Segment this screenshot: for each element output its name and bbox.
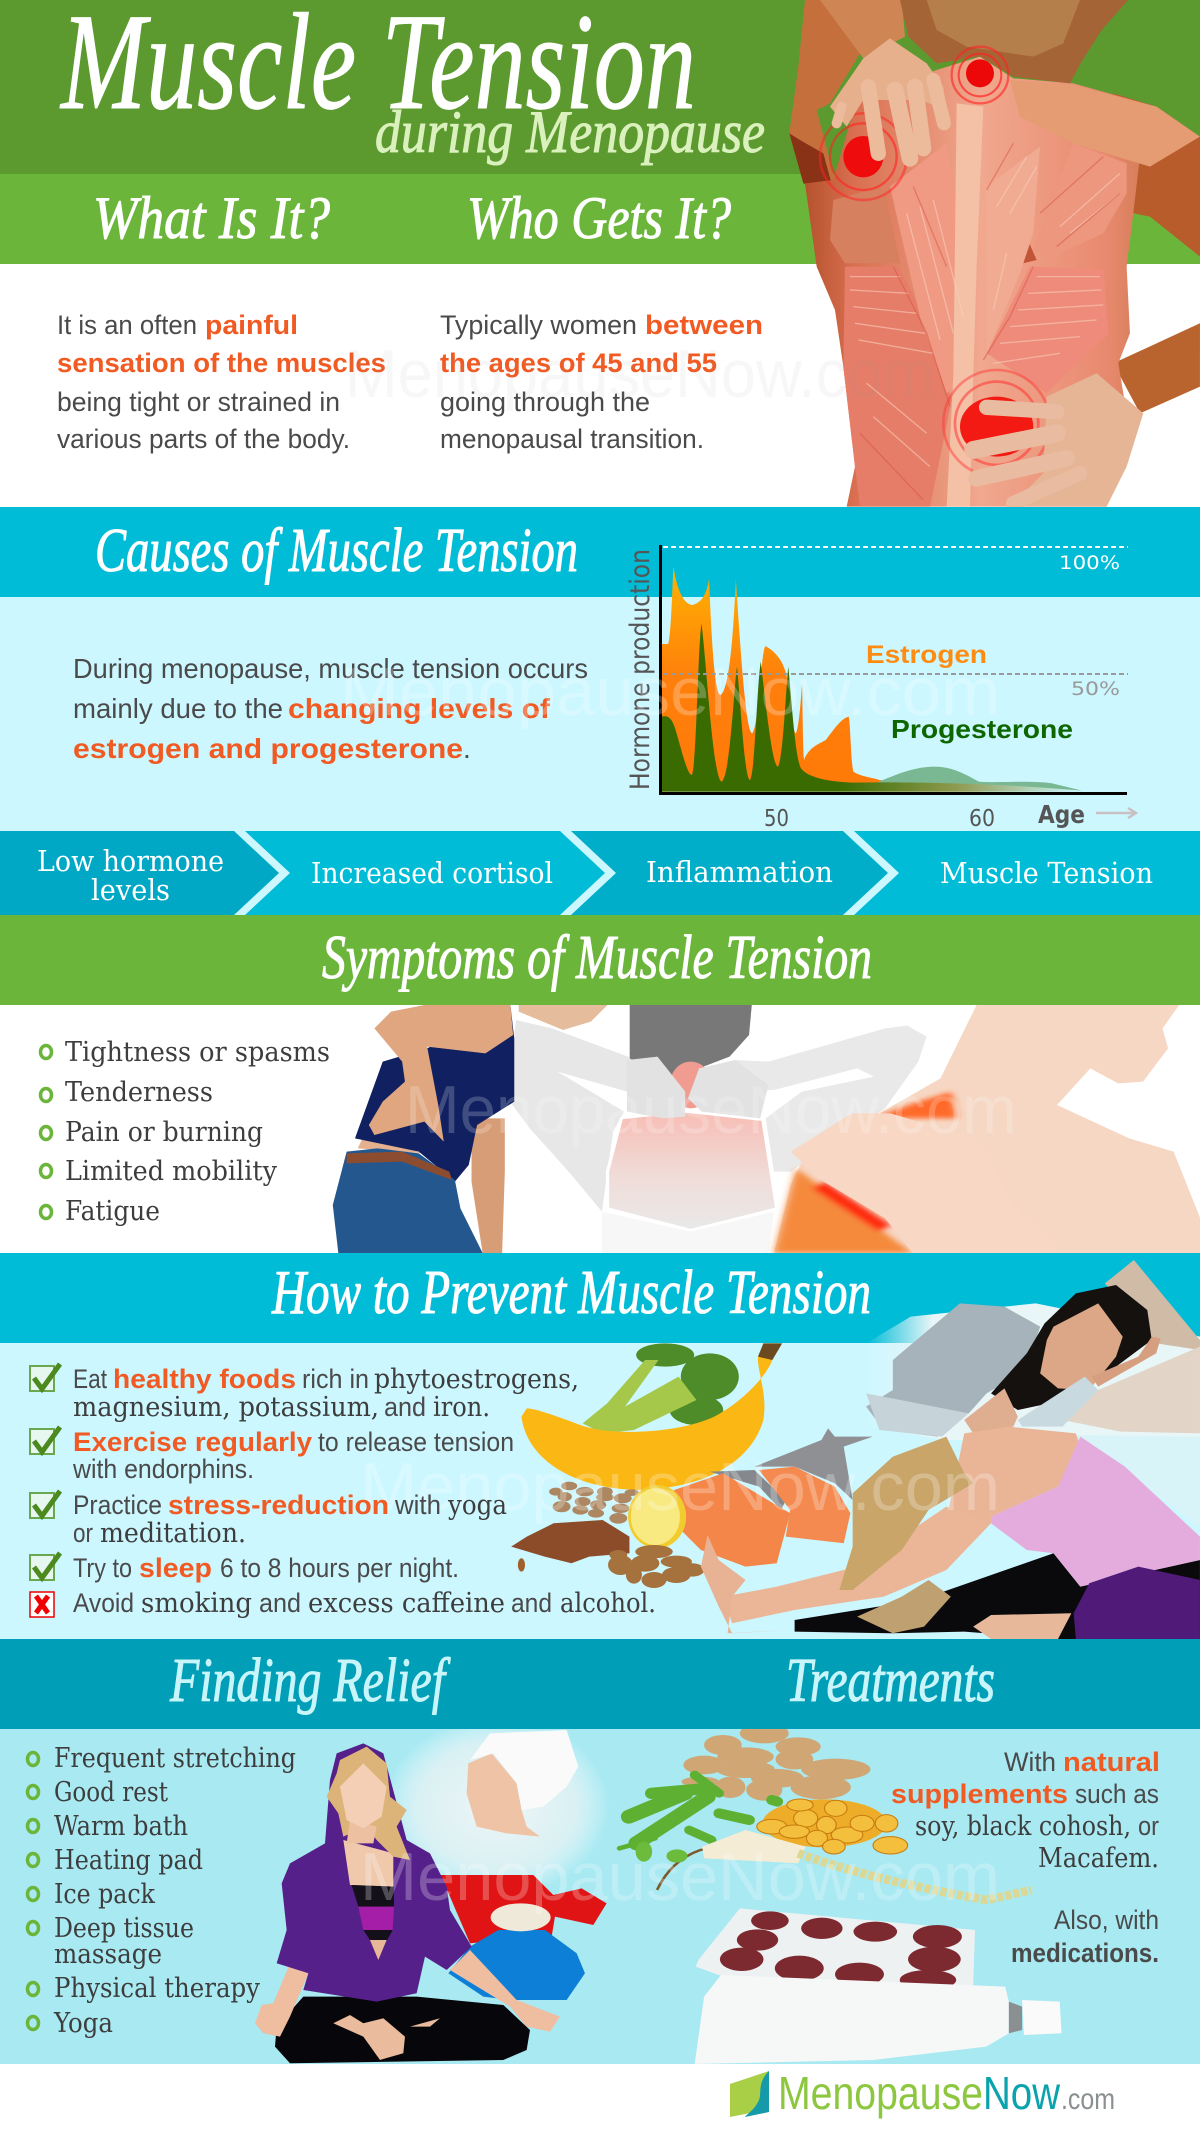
logo: Menopause bbox=[778, 2067, 983, 2119]
flower stalk bbox=[702, 1830, 1031, 1900]
towel woman: fog bbox=[383, 1717, 610, 1897]
step: inflammation: Inflammation bbox=[646, 855, 833, 889]
prevention list: alcohol. bbox=[560, 1588, 656, 1619]
woman 1: right arm bbox=[472, 1118, 505, 1255]
yoga woman: tank top bbox=[991, 1437, 1200, 1587]
tablets bbox=[681, 1723, 870, 1801]
prevention list: iron. bbox=[433, 1392, 490, 1423]
treatments text: supplements bbox=[891, 1779, 1068, 1809]
symptoms list: Fatigue bbox=[65, 1196, 160, 1227]
salmon skin bbox=[710, 1470, 786, 1510]
yoga woman: arms bbox=[723, 1507, 991, 1623]
broccoli stems bbox=[583, 1360, 696, 1433]
yoga woman: jacket bbox=[277, 1743, 472, 2002]
prevention list: with endorphins. bbox=[72, 1454, 254, 1484]
relief list: Good rest bbox=[54, 1777, 168, 1808]
heading: prevent: How to Prevent Muscle Tension bbox=[271, 1259, 871, 1327]
sleeve bbox=[1018, 1377, 1098, 1427]
sleeping woman: face bbox=[1040, 1303, 1123, 1390]
prevention list: excess caffeine bbox=[308, 1588, 505, 1619]
series label: estrogen: Estrogen bbox=[866, 641, 987, 669]
blister pack bbox=[696, 1908, 975, 1987]
stem bbox=[657, 1845, 730, 1890]
salmon steak left bbox=[674, 1473, 790, 1567]
watermark: MenopauseNow.com bbox=[360, 1839, 1000, 1915]
treatment photos bbox=[619, 1723, 1062, 2064]
woman 3: neck and shoulder bbox=[774, 1005, 1200, 1253]
relief list bbox=[28, 1743, 296, 2039]
text block: causes: . bbox=[463, 733, 471, 764]
prevention list: meditation. bbox=[100, 1518, 246, 1549]
text block: who gets it: between bbox=[645, 310, 763, 340]
yoga woman: feet bbox=[333, 2015, 440, 2060]
text block: what is it: sensation of the muscles bbox=[57, 348, 386, 378]
relief photos bbox=[255, 1717, 1062, 2064]
treatments text: Macafem. bbox=[1038, 1843, 1159, 1874]
prevention list: and bbox=[384, 1392, 426, 1422]
heading: what is it: What Is It? bbox=[93, 185, 330, 251]
progesterone hill bbox=[876, 767, 1082, 791]
chart: hormone production: 50 bbox=[764, 806, 789, 832]
subtitle: during Menopause bbox=[375, 99, 765, 165]
woman 2: neck bbox=[672, 1062, 704, 1108]
relief list: Warm bath bbox=[54, 1811, 188, 1842]
yoga woman: arms bbox=[255, 1950, 560, 2037]
logo: Now bbox=[983, 2067, 1061, 2119]
woman 2: cloth bbox=[602, 1212, 774, 1253]
series label: progesterone: Progesterone bbox=[891, 714, 1073, 744]
icon: logo mark bbox=[730, 2071, 769, 2117]
woman 2: back bbox=[608, 1112, 777, 1230]
prevention list: smoking bbox=[141, 1588, 252, 1619]
bed sheets bbox=[866, 1303, 1200, 1440]
prevention list: Exercise regularly bbox=[73, 1427, 312, 1457]
yoga woman: foot left bbox=[701, 1535, 790, 1633]
watermark: MenopauseNow.com bbox=[340, 654, 1000, 730]
yoga woman: hair bbox=[327, 1747, 410, 1860]
woman 2: hands bbox=[627, 1057, 768, 1118]
yoga woman: legs bbox=[795, 1553, 1200, 1639]
torso bbox=[805, 57, 1157, 507]
woman 2: right arm bbox=[735, 1026, 927, 1172]
text block: who gets it: Typically women bbox=[440, 310, 637, 340]
spine bbox=[947, 103, 983, 507]
lemon bbox=[628, 1485, 686, 1548]
right lat muscle bbox=[987, 267, 1108, 393]
woman 3: hand bbox=[790, 1113, 918, 1253]
yoga woman: pants bbox=[275, 1997, 530, 2063]
pain spot: lower back bbox=[943, 370, 1050, 477]
ice pack cap bbox=[491, 1903, 551, 1931]
woman 1: chin bbox=[519, 1005, 608, 1030]
pillow front bbox=[1062, 1347, 1200, 1433]
lower hand bbox=[973, 373, 1143, 507]
text block: causes: estrogen and progesterone bbox=[73, 733, 463, 764]
treatments text: With bbox=[1004, 1747, 1056, 1777]
symptoms list: Tenderness bbox=[65, 1077, 213, 1108]
text block: what is it: various parts of the body. bbox=[57, 424, 350, 454]
lentils bbox=[549, 1482, 639, 1524]
prevention list: phytoestrogens, bbox=[374, 1364, 579, 1395]
yoga woman: back skin bbox=[946, 1427, 1080, 1523]
right upper muscle bbox=[1080, 146, 1126, 244]
prevention list: healthy foods bbox=[113, 1364, 296, 1394]
chart: hormone production: Age bbox=[1038, 800, 1085, 829]
symptoms list bbox=[40, 1037, 330, 1227]
text block: who gets it: the ages of 45 and 55 bbox=[440, 348, 717, 378]
relief list: Heating pad bbox=[54, 1845, 203, 1876]
flax seeds bbox=[511, 1520, 629, 1563]
woman 1: left arm bbox=[369, 1005, 513, 1142]
pillow back bbox=[1105, 1260, 1200, 1350]
prevention list: with bbox=[394, 1490, 441, 1520]
text block: who gets it: menopausal transition. bbox=[440, 424, 704, 454]
50% line bbox=[663, 673, 1128, 675]
chart: hormone production: 100% bbox=[1059, 552, 1120, 574]
right arm bbox=[1113, 93, 1200, 257]
prevention list bbox=[30, 1364, 656, 1619]
pain spot: shoulder bbox=[820, 113, 907, 200]
prevention list: magnesium, potassium, bbox=[73, 1392, 379, 1423]
relief list: Frequent stretching bbox=[54, 1743, 296, 1774]
prevention list: or bbox=[73, 1518, 93, 1548]
prevention list: yoga bbox=[447, 1490, 507, 1521]
prevention list: 6 to 8 hours per night. bbox=[220, 1553, 459, 1583]
prevention list: and bbox=[259, 1588, 301, 1618]
watermark: MenopauseNow.com bbox=[405, 1072, 1017, 1148]
heading: who gets it: Who Gets It? bbox=[467, 185, 731, 251]
chart: hormone production: 50% bbox=[1071, 678, 1120, 700]
yoga woman: hip bbox=[1074, 1567, 1200, 1639]
yoga woman: face bbox=[340, 1763, 387, 1828]
prevention list: rich in bbox=[302, 1364, 369, 1394]
prevention photos bbox=[511, 1260, 1200, 1639]
forearm bbox=[1113, 323, 1200, 413]
woman 1: navy top bbox=[355, 1005, 514, 1182]
salmon steak right bbox=[759, 1467, 850, 1543]
icon: red x box bbox=[30, 1592, 54, 1617]
sleeping woman: arm bbox=[1091, 1337, 1161, 1387]
photo: woman's back with highlighted muscles bbox=[789, 0, 1200, 507]
relief list: Ice pack bbox=[54, 1879, 156, 1910]
banana bbox=[521, 1343, 782, 1490]
prevention list: Avoid bbox=[73, 1588, 134, 1618]
towel woman: face bbox=[467, 1753, 540, 1837]
text block: who gets it bbox=[440, 310, 763, 454]
treatments text: Also, with bbox=[1054, 1905, 1159, 1935]
yoga woman: foot right bbox=[973, 1613, 1071, 1639]
text block: causes: During menopause, muscle tension occurs bbox=[73, 653, 588, 684]
sleeping woman: hand bbox=[964, 1388, 1018, 1433]
watermark: MenopauseNow.com bbox=[360, 1449, 1000, 1525]
process flow: causes chain: levels bbox=[91, 873, 170, 907]
prevention list: Eat bbox=[73, 1364, 107, 1394]
process flow: causes chain: Low hormone bbox=[37, 844, 224, 878]
capsules bbox=[757, 1799, 908, 1854]
yoga woman: chest and top bbox=[343, 1840, 394, 1960]
symptoms list: Pain or burning bbox=[65, 1117, 263, 1148]
symptoms photos bbox=[333, 1005, 1200, 1255]
step: increased cortisol: Increased cortisol bbox=[311, 856, 553, 890]
woman 1: waist bbox=[358, 1140, 421, 1154]
step: muscle tension: Muscle Tension bbox=[940, 856, 1153, 890]
heading: finding relief: Finding Relief bbox=[169, 1647, 451, 1715]
text block: causes: mainly due to the bbox=[73, 693, 283, 724]
treatments text: medications. bbox=[1011, 1938, 1159, 1968]
treatments text: or bbox=[1138, 1811, 1159, 1841]
chart: hormone production: 60 bbox=[969, 806, 995, 832]
woman 3: red glow bbox=[774, 1092, 957, 1253]
left forearm bbox=[820, 0, 905, 58]
text block: causes bbox=[73, 653, 588, 764]
chart: hormone production: Hormone production bbox=[625, 549, 656, 790]
ice pack bbox=[448, 1930, 585, 2000]
hair bbox=[900, 0, 1128, 83]
upper hand bbox=[830, 38, 947, 158]
axes bbox=[660, 545, 1127, 794]
pain spot: neck bbox=[952, 47, 1008, 103]
text block: who gets it: going through the bbox=[440, 387, 650, 417]
woman 2: hair bbox=[630, 1005, 752, 1080]
broccoli florets bbox=[636, 1343, 739, 1425]
relief list: Deep tissue bbox=[54, 1913, 194, 1944]
yoga woman: neck bbox=[347, 1820, 377, 1843]
treatments text bbox=[891, 1747, 1160, 1968]
sleeping woman: hair bbox=[991, 1285, 1152, 1410]
text block: what is it: It is an often bbox=[57, 310, 197, 340]
progesterone area bbox=[661, 623, 1082, 792]
left lat muscle bbox=[843, 267, 952, 507]
central fan muscles bbox=[890, 147, 949, 393]
logo bbox=[730, 2067, 1115, 2119]
prevention list: Practice bbox=[73, 1490, 162, 1520]
heading: causes: Causes of Muscle Tension bbox=[95, 517, 578, 585]
chart: hormone production bbox=[625, 545, 1136, 832]
logo: .com bbox=[1061, 2083, 1115, 2116]
relief list: Physical therapy bbox=[54, 1973, 261, 2004]
pills bbox=[720, 1911, 962, 1990]
step: low hormone levels bbox=[0, 831, 279, 915]
left upper arm bbox=[789, 0, 860, 187]
muscle streaks bbox=[850, 157, 1120, 467]
almonds bbox=[608, 1545, 704, 1588]
100% line bbox=[663, 546, 1128, 548]
prevention list: stress-reduction bbox=[168, 1490, 389, 1520]
woman 2: left arm bbox=[508, 1020, 632, 1212]
yoga woman: hair bbox=[839, 1437, 973, 1590]
tube cap bbox=[1022, 2000, 1062, 2035]
age arrow bbox=[1096, 808, 1136, 818]
icons: check boxes bbox=[30, 1364, 60, 1580]
heading: treatments: Treatments bbox=[786, 1647, 995, 1715]
estrogen area bbox=[661, 567, 983, 792]
text block: causes: changing levels of bbox=[288, 693, 551, 724]
text block: what is it: being tight or strained in bbox=[57, 387, 340, 417]
treatments text: natural bbox=[1063, 1747, 1160, 1777]
symptoms list: Tightness or spasms bbox=[65, 1037, 330, 1068]
towel woman: towel bbox=[470, 1730, 578, 1810]
woman 1: jeans bbox=[333, 1148, 483, 1253]
process flow: causes chain bbox=[0, 831, 1200, 915]
watermark: MenopauseNow.com bbox=[345, 336, 935, 412]
treatments text: such as bbox=[1075, 1779, 1159, 1809]
pea pods bbox=[619, 1775, 777, 1848]
shoulder bbox=[1010, 80, 1200, 167]
prevention list: Try to bbox=[73, 1553, 132, 1583]
symptoms list: Limited mobility bbox=[65, 1156, 278, 1187]
hot water bottle bbox=[440, 1875, 607, 1943]
text block: what is it bbox=[57, 310, 386, 454]
prevention list: sleep bbox=[139, 1553, 212, 1583]
treatments text: soy, black cohosh, bbox=[915, 1811, 1131, 1842]
relief list: massage bbox=[54, 1939, 162, 1970]
ointment tube bbox=[695, 1975, 1009, 2064]
prevention list: to release tension bbox=[318, 1427, 514, 1457]
heading: symptoms: Symptoms of Muscle Tension bbox=[322, 924, 872, 992]
sleeping woman: sweater bbox=[866, 1303, 1040, 1437]
relief list: Yoga bbox=[53, 2008, 113, 2039]
prevention list: and bbox=[511, 1588, 552, 1618]
text block: what is it: painful bbox=[205, 310, 298, 340]
